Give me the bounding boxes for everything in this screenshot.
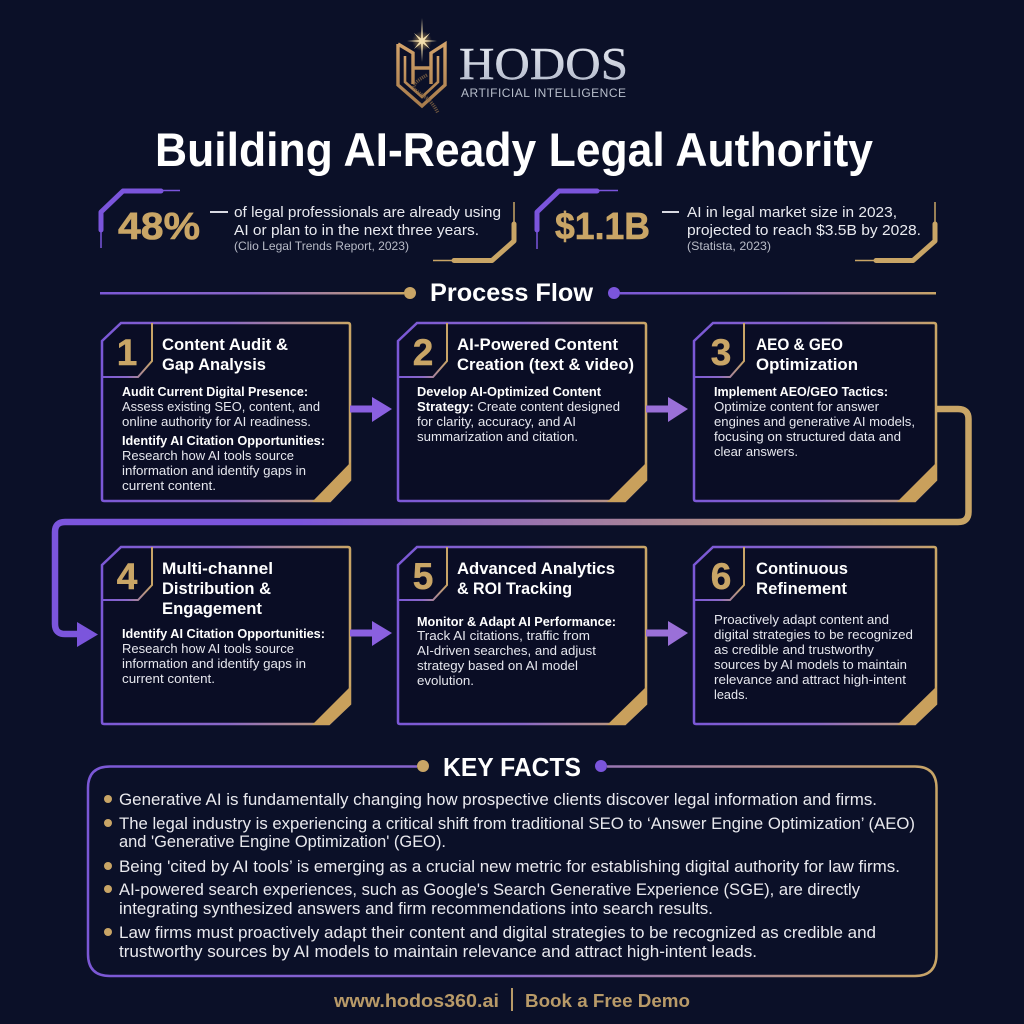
step title: Creation (text & video) xyxy=(457,356,634,374)
step body: online authority for AI readiness. xyxy=(122,414,311,429)
step body xyxy=(417,384,620,444)
step body: summarization and citation. xyxy=(417,429,578,444)
step title xyxy=(162,336,288,374)
stat number: $1.1B xyxy=(555,206,650,248)
stat text: (Statista, 2023) xyxy=(687,239,771,253)
arrow: step 1 to 2 xyxy=(350,397,392,422)
step body: strategy based on AI model xyxy=(417,658,578,673)
step body: current content. xyxy=(122,478,216,493)
step number: 2 xyxy=(413,332,433,373)
title: Building AI-Ready Legal Authority xyxy=(155,123,873,176)
step body: focusing on structured data and xyxy=(714,429,901,444)
step body: Assess existing SEO, content, and xyxy=(122,399,320,414)
step title: Advanced Analytics xyxy=(457,560,615,578)
step body: Identify AI Citation Opportunities: xyxy=(122,626,325,641)
step title: Engagement xyxy=(162,600,262,618)
logo wordmark: HODOS xyxy=(459,38,628,89)
step title: AI-Powered Content xyxy=(457,336,619,354)
stat: $1.1B market size xyxy=(537,190,935,260)
panel: step 2 xyxy=(398,323,647,502)
step body: for clarity, accuracy, and AI xyxy=(417,414,576,429)
fact 2: The legal industry is experiencing a critical shift from traditional SEO to ‘Answer Engine Optimization’ (AEO) xyxy=(119,814,915,833)
step body: sources by AI models to maintain xyxy=(714,657,907,672)
arrow: step 5 to 6 xyxy=(646,621,688,646)
dash xyxy=(662,211,679,213)
bracket: gold bottom right xyxy=(433,202,514,260)
fact 5: Law firms must proactively adapt their content and digital strategies to be recognized as credible and xyxy=(119,923,876,942)
step body: information and identify gaps in xyxy=(122,656,306,671)
dash xyxy=(210,211,228,213)
fact 4: AI-powered search experiences, such as Google's Search Generative Experience (SGE), are directly xyxy=(119,880,861,899)
stat text: AI or plan to in the next three years. xyxy=(234,222,479,239)
fact 1: Generative AI is fundamentally changing how prospective clients discover legal information and firms. xyxy=(119,790,877,809)
panel outline xyxy=(88,766,936,976)
step title xyxy=(756,336,858,374)
step body xyxy=(714,384,915,459)
fact 4: integrating synthesized answers and firm recommendations into search results. xyxy=(119,899,713,918)
bracket: purple top left xyxy=(537,190,618,249)
stat text xyxy=(687,204,921,253)
step title xyxy=(756,560,848,598)
fact 2: and 'Generative Engine Optimization' (GEO). xyxy=(119,832,446,851)
step title: & ROI Tracking xyxy=(457,580,572,598)
panel: step 6 xyxy=(694,547,937,725)
stat text: of legal professionals are already using xyxy=(234,204,501,221)
step body: Research how AI tools source xyxy=(122,641,294,656)
step title: Optimization xyxy=(756,356,858,374)
panel: step 3 xyxy=(694,323,937,502)
step number: 1 xyxy=(117,332,137,373)
step number: 4 xyxy=(117,556,138,597)
step body: Audit Current Digital Presence: xyxy=(122,384,308,399)
step body: clear answers. xyxy=(714,444,798,459)
step body: AI-driven searches, and adjust xyxy=(417,643,596,658)
icon: gold shield with star xyxy=(398,18,445,113)
step body: Develop AI-Optimized Content xyxy=(417,384,602,399)
fact 5: trustworthy sources by AI models to maintain relevance and attract high-intent leads. xyxy=(119,942,757,961)
step title xyxy=(457,560,615,598)
step number: 6 xyxy=(711,556,731,597)
arrow: step 2 to 3 xyxy=(646,397,688,422)
panel: step 4 xyxy=(102,547,351,725)
fact 3: Being 'cited by AI tools’ is emerging as a crucial new metric for establishing digital authority for law firms. xyxy=(119,857,900,876)
step body: Strategy: Create content designed xyxy=(417,399,620,414)
stat text: projected to reach $3.5B by 2028. xyxy=(687,222,921,239)
step body: Research how AI tools source xyxy=(122,448,294,463)
stat number: 48% xyxy=(118,206,200,248)
step title: Distribution & xyxy=(162,580,271,598)
step title: Content Audit & xyxy=(162,336,288,354)
footer: www.hodos360.ai xyxy=(333,990,499,1011)
logo tagline: ARTIFICIAL INTELLIGENCE xyxy=(461,86,626,100)
step body: Identify AI Citation Opportunities: xyxy=(122,433,325,448)
step body: Implement AEO/GEO Tactics: xyxy=(714,384,888,399)
stat text xyxy=(234,204,501,253)
step number: 5 xyxy=(413,556,433,597)
step title xyxy=(457,336,634,374)
step body: current content. xyxy=(122,671,215,686)
step body: Proactively adapt content and xyxy=(714,612,889,627)
step body: Monitor & Adapt AI Performance: xyxy=(417,614,616,629)
step body: Optimize content for answer xyxy=(714,399,880,414)
panel: step 5 xyxy=(398,547,647,725)
logo xyxy=(398,18,628,113)
footer xyxy=(333,988,690,1011)
heading: process flow: Process Flow xyxy=(430,279,594,307)
step body: relevance and attract high-intent xyxy=(714,672,906,687)
bracket: purple top left xyxy=(101,190,180,248)
fact 5 xyxy=(104,923,876,961)
step title: AEO & GEO xyxy=(756,336,843,354)
arrow: step 4 to 5 xyxy=(350,621,392,646)
step body: engines and generative AI models, xyxy=(714,414,915,429)
step title: Gap Analysis xyxy=(162,356,266,374)
step body: as credible and trustworthy xyxy=(714,642,875,657)
step title xyxy=(162,560,273,618)
step body: digital strategies to be recognized xyxy=(714,627,913,642)
panel: step 1 xyxy=(102,323,351,502)
step body xyxy=(417,614,616,688)
step body: information and identify gaps in xyxy=(122,463,306,478)
stat: 48% of legal professionals xyxy=(101,190,514,260)
footer: Book a Free Demo xyxy=(525,990,690,1011)
step body: evolution. xyxy=(417,673,474,688)
heading: key facts: KEY FACTS xyxy=(443,752,581,782)
step title: Refinement xyxy=(756,580,847,598)
step body xyxy=(122,384,325,493)
step number: 3 xyxy=(711,332,731,373)
heading: process flow xyxy=(100,279,936,307)
step body: leads. xyxy=(714,687,748,702)
fact 2 xyxy=(104,814,915,851)
step title: Multi-channel xyxy=(162,560,273,578)
arrow: connector from step 3 to step 4 xyxy=(55,409,968,647)
step body xyxy=(714,612,913,702)
step title: Continuous xyxy=(756,560,848,578)
fact 4 xyxy=(104,880,861,918)
stat text: AI in legal market size in 2023, xyxy=(687,204,897,221)
step body xyxy=(122,626,325,686)
panel: key facts xyxy=(88,752,936,976)
step body: Track AI citations, traffic from xyxy=(417,628,590,643)
stat text: (Clio Legal Trends Report, 2023) xyxy=(234,239,409,253)
bracket: gold bottom right xyxy=(855,202,935,260)
